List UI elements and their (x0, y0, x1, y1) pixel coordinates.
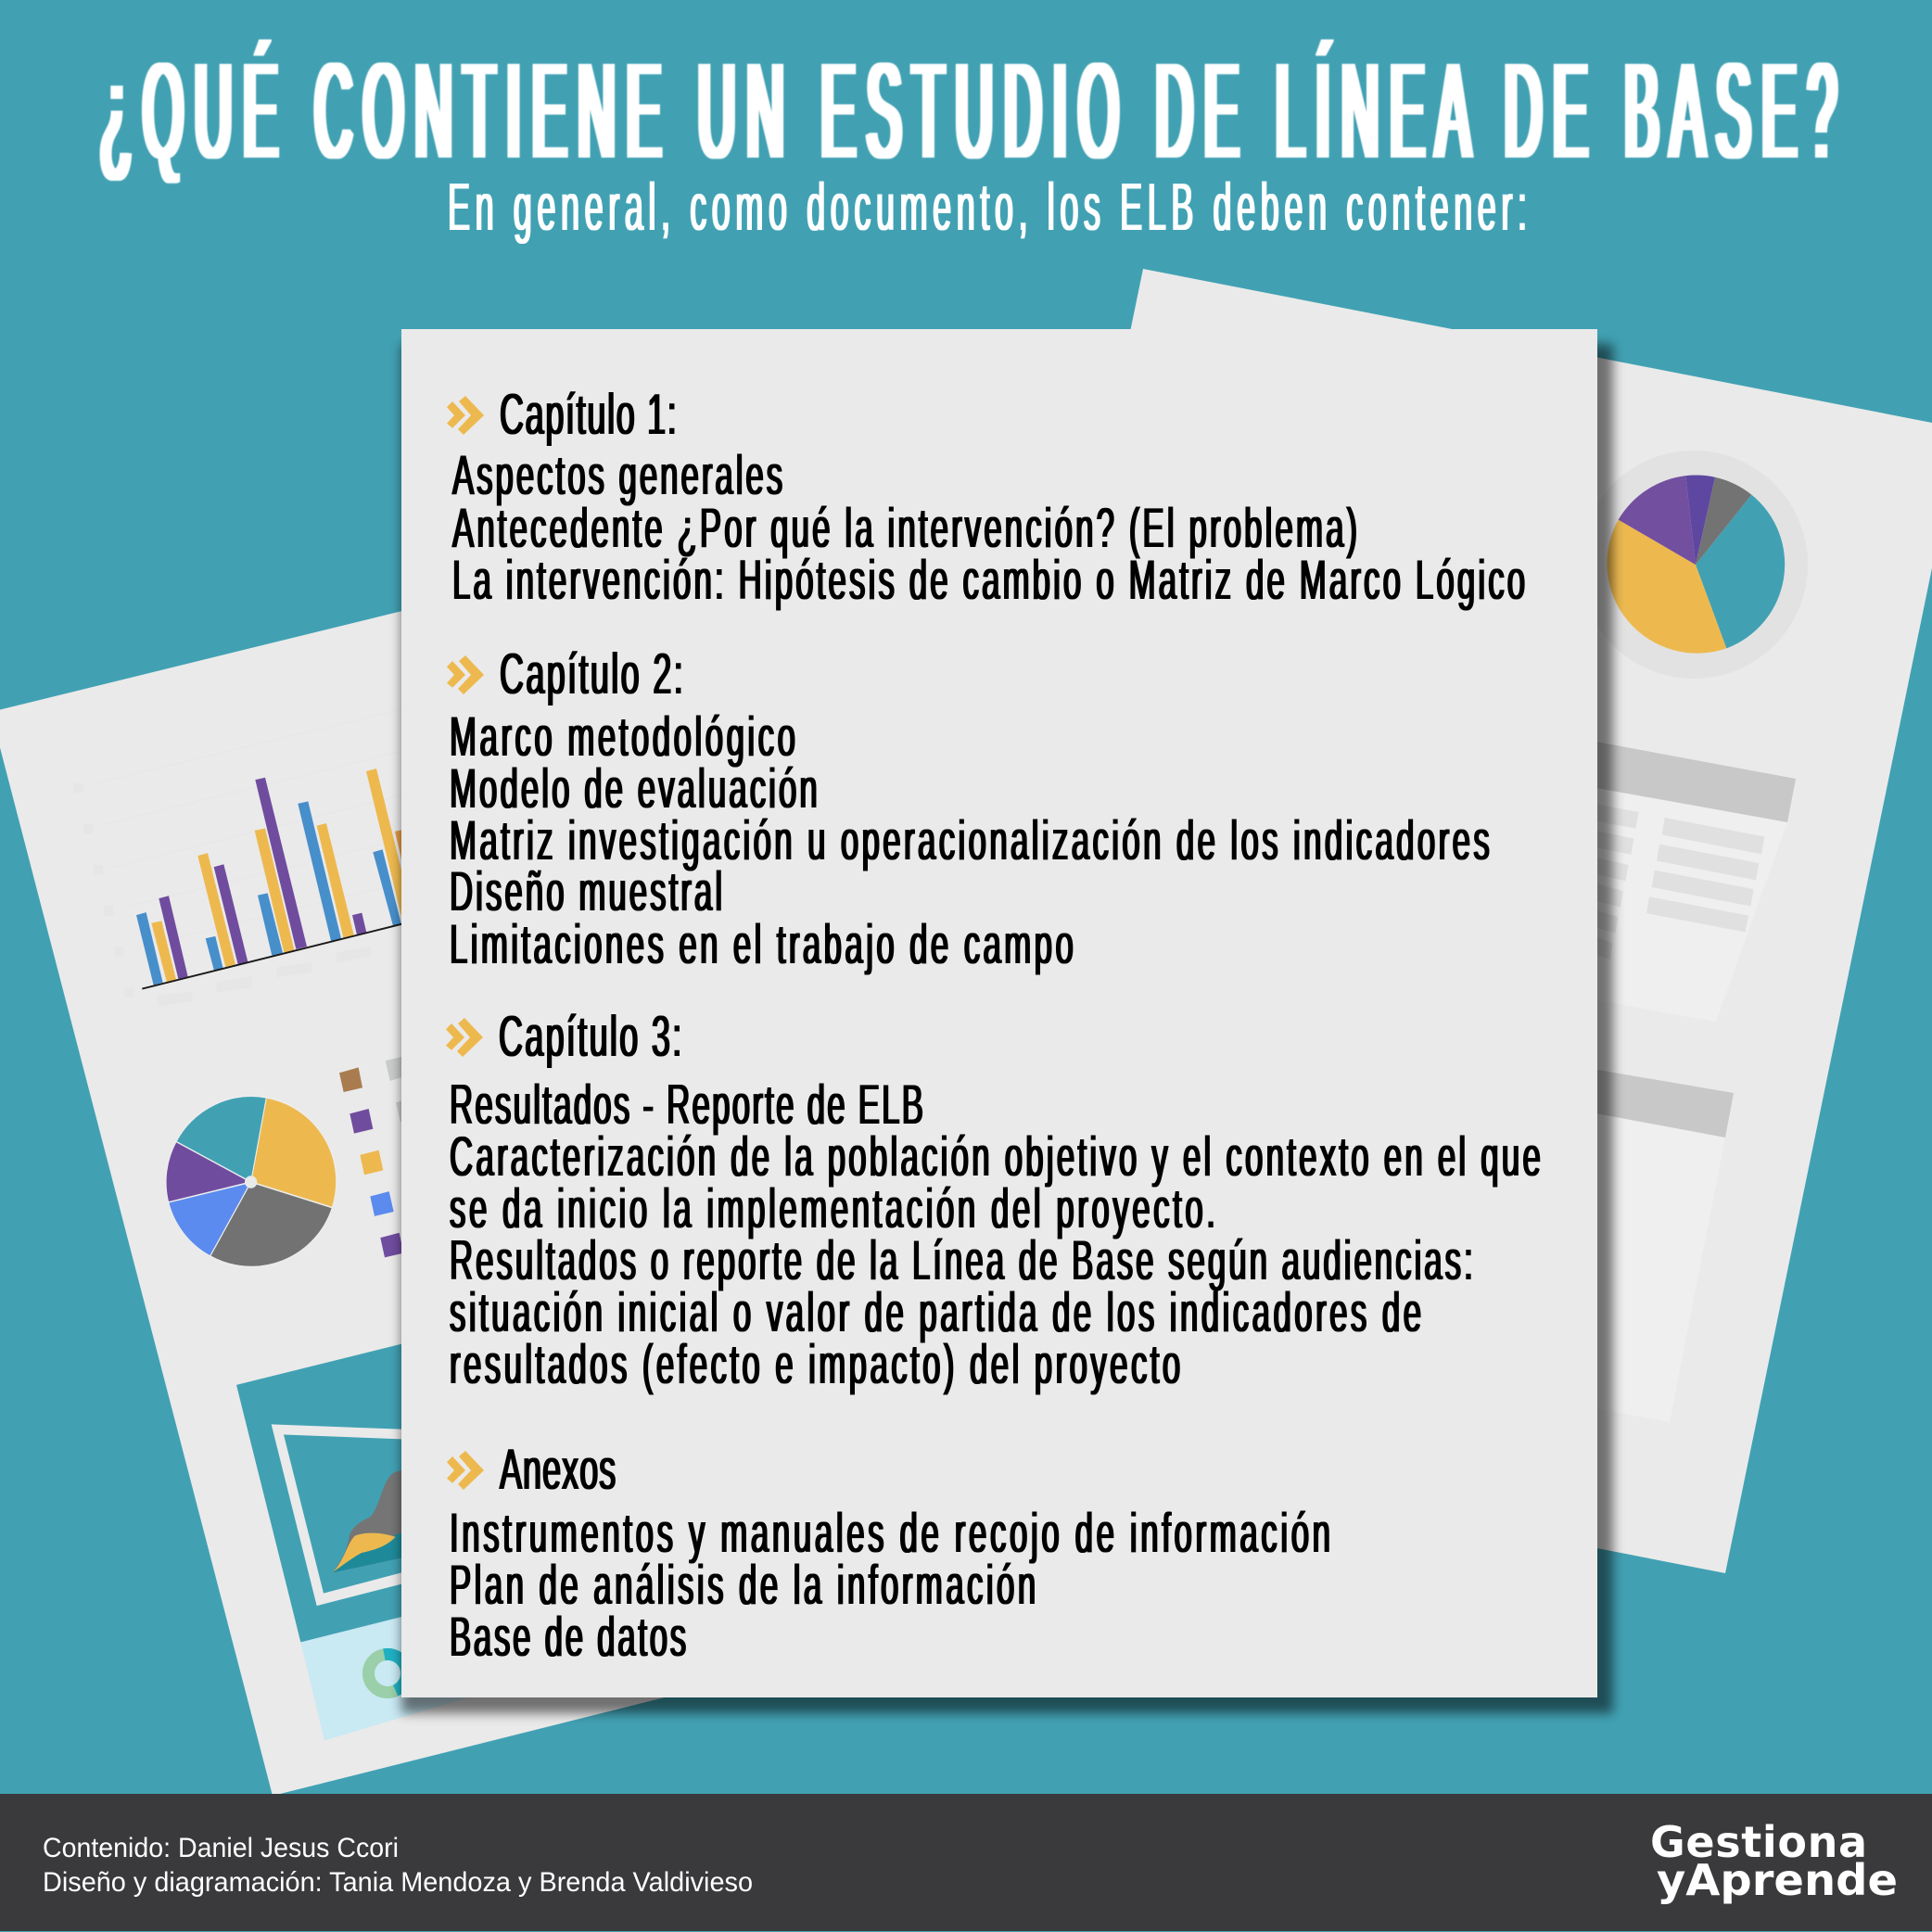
bar chart (73, 709, 426, 1007)
text block: anexos: Instrumentos y manuales de recojo de información (450, 1503, 1330, 1564)
text block: capítulo 3: situación inicial o valor de partida de los indicadores de (450, 1282, 1421, 1343)
text block: capítulo 2: Modelo de evaluación (450, 758, 818, 820)
section: capítulo 1 (447, 382, 1525, 611)
text block: capítulo 1: Aspectos generales (452, 445, 782, 506)
text block: capítulo 3: resultados (efecto e impacto) del proyecto (450, 1334, 1180, 1395)
text block: capítulo 2: Limitaciones en el trabajo de campo (450, 914, 1074, 975)
heading: capítulo 2: Capítulo 2: (500, 642, 683, 705)
chart legend (339, 1055, 408, 1257)
footer bar (0, 1794, 1932, 1931)
table: right document lower (1576, 1066, 1734, 1422)
text block: capítulo 1: La intervención: Hipótesis de cambio o Matriz de Marco Lógico (452, 550, 1525, 611)
icon: mountain picture (332, 1470, 433, 1572)
text block: capítulo 3: Resultados o reporte de la Línea de Base según audiencias: (450, 1230, 1473, 1291)
donut chart: left document (369, 1654, 407, 1693)
table: right document upper (1576, 738, 1796, 1022)
text block: anexos: Plan de análisis de la información (450, 1555, 1036, 1616)
text block: capítulo 2: Diseño muestral (450, 861, 722, 922)
section: anexos (447, 1437, 1330, 1668)
subtitle: En general, como documento, los ELB deben contener: (448, 170, 1527, 245)
icon: chevrons chapter 1 (447, 396, 484, 435)
text block: capítulo 2: Marco metodológico (450, 706, 795, 768)
title: ¿QUÉ CONTIENE UN ESTUDIO DE LÍNEA DE BASE? (100, 33, 1837, 187)
panel: main document (401, 329, 1597, 1697)
text block: capítulo 2 (450, 706, 1490, 975)
text block: capítulo 3: Resultados - Reporte de ELB (450, 1074, 923, 1136)
icon: chevrons chapter 2 (447, 655, 484, 694)
section: capítulo 2 (447, 642, 1490, 975)
pie chart: left document (166, 1096, 337, 1267)
text block: capítulo 3 (450, 1074, 1541, 1395)
icon: chevrons chapter 3 (446, 1018, 483, 1057)
icon: chevrons anexos (447, 1451, 484, 1490)
text block: capítulo 1: Antecedente ¿Por qué la intervención? (El problema) (452, 498, 1357, 559)
text block: capítulo 1 (452, 445, 1525, 611)
heading: capítulo 3: Capítulo 3: (499, 1004, 681, 1068)
text block: capítulo 2: Matriz investigación u operacionalización de los indicadores (450, 810, 1490, 871)
main document shadow (401, 344, 1613, 1713)
text block: capítulo 3: se da inicio la implementación del proyecto. (450, 1178, 1215, 1239)
logo: Gestiona (1650, 1817, 1867, 1867)
text block: anexos (450, 1503, 1330, 1668)
heading: capítulo 1: Capítulo 1: (500, 382, 677, 446)
footer credits: Contenido: Daniel Jesus Ccori (43, 1833, 399, 1863)
image card: left document (236, 1340, 498, 1740)
logo (1650, 1817, 1898, 1905)
panel: left background document (0, 527, 927, 1796)
footer credits (43, 1833, 753, 1898)
pie chart: right document (1580, 451, 1808, 679)
logo: yAprende (1657, 1855, 1898, 1905)
section: capítulo 3 (446, 1004, 1541, 1395)
heading: anexos: Anexos (500, 1437, 616, 1501)
footer credits: Diseño y diagramación: Tania Mendoza y Brenda Valdivieso (43, 1867, 753, 1898)
text block: capítulo 3: Caracterización de la población objetivo y el contexto en el que (450, 1126, 1541, 1188)
text block: anexos: Base de datos (450, 1607, 686, 1668)
panel: right background document (908, 269, 1932, 1573)
